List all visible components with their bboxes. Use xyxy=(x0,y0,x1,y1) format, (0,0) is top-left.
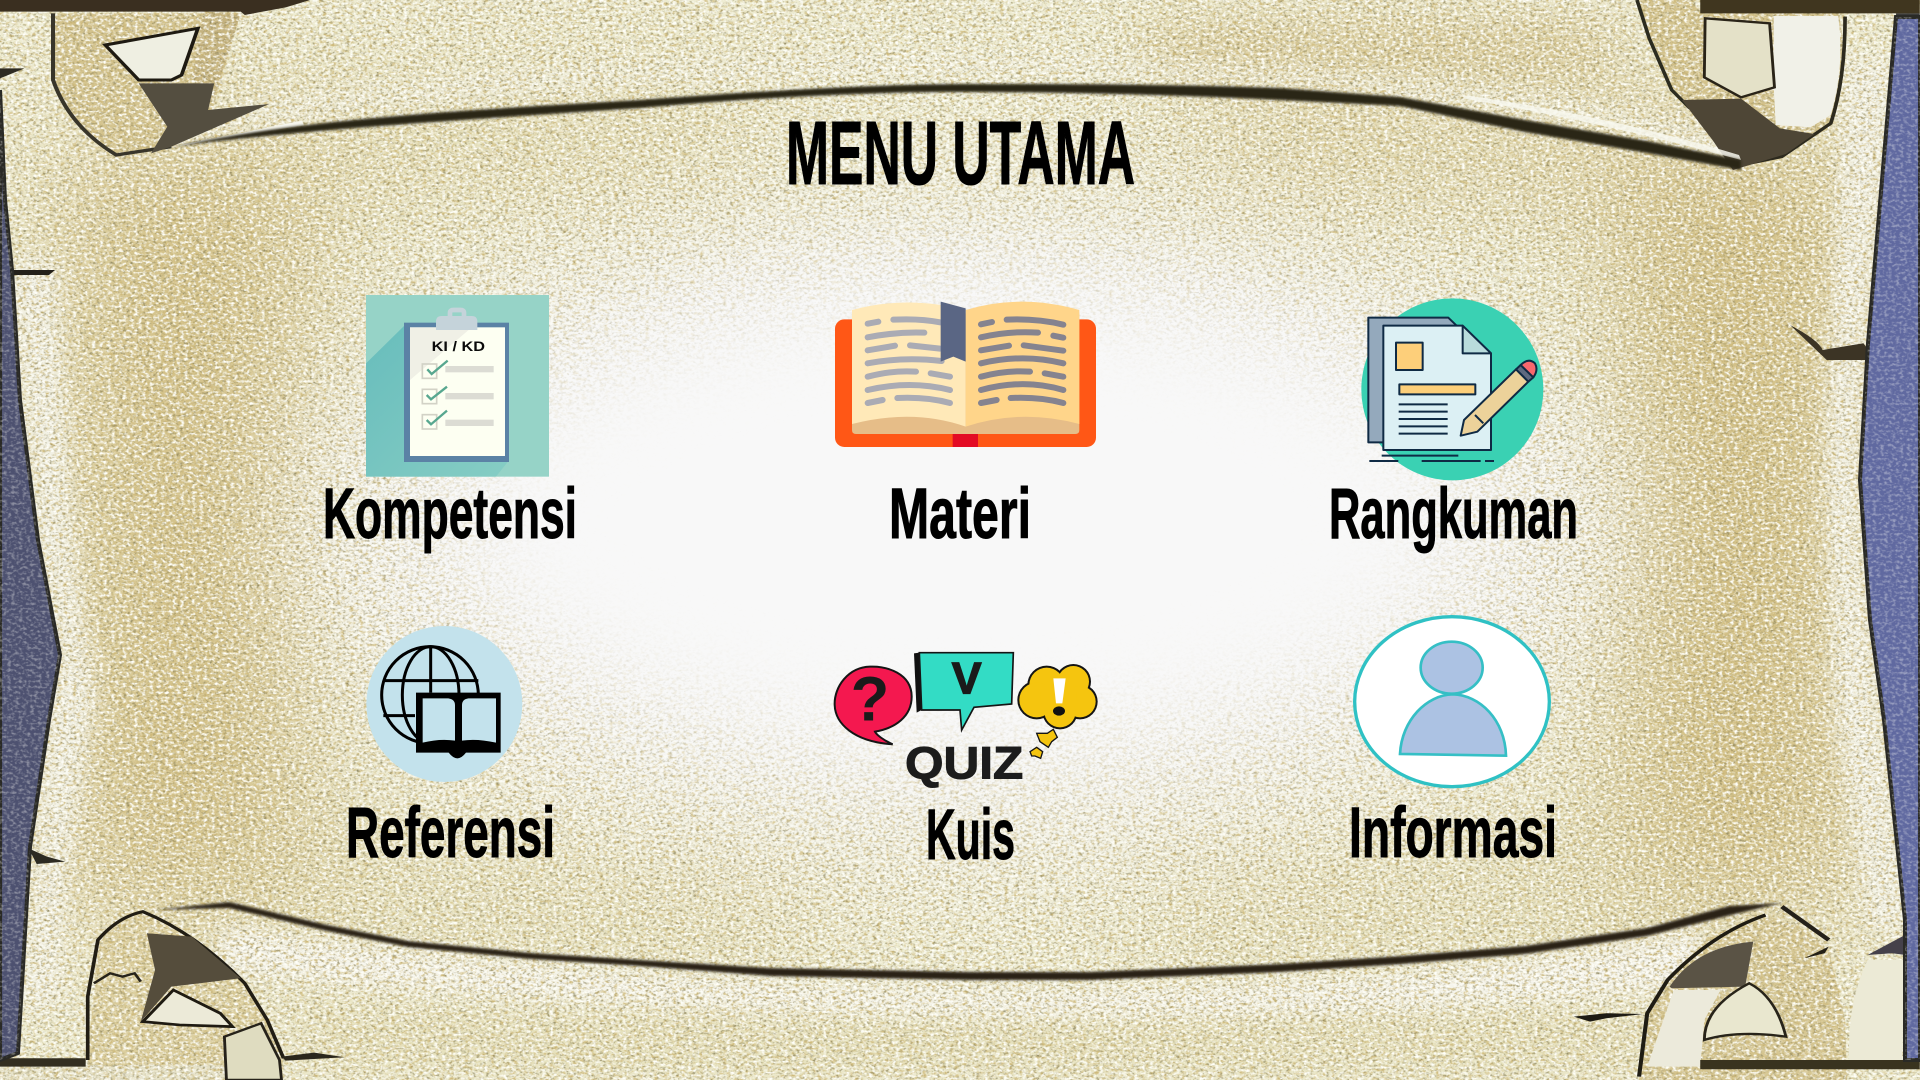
bottom fold line xyxy=(155,902,1782,980)
label: Materi: Materi xyxy=(889,475,1031,554)
curl fills: top left xyxy=(53,12,241,155)
label: Referensi: Referensi xyxy=(346,794,555,873)
icon: Kuis quiz bubbles xyxy=(835,653,1098,788)
icon: Kuis quiz bubbles: ? xyxy=(851,665,889,735)
label: Kuis: Kuis xyxy=(926,796,1015,875)
label: Informasi: Informasi xyxy=(1349,794,1557,873)
side strip left xyxy=(0,90,60,1060)
corner curl: bottom left xyxy=(0,848,345,1080)
side strip right xyxy=(1860,17,1920,1060)
top fold line xyxy=(171,84,1741,170)
icon: Informasi person xyxy=(1355,617,1549,787)
title: MENU UTAMA xyxy=(786,104,1135,204)
curl fills: bottom left xyxy=(0,912,284,1080)
icon: Kuis quiz bubbles: V xyxy=(952,654,982,703)
label: Kompetensi: Kompetensi xyxy=(323,475,577,554)
icon: Kompetensi clipboard xyxy=(366,295,549,477)
label: Rangkuman: Rangkuman xyxy=(1329,475,1578,554)
curl fills: bottom right xyxy=(1639,915,1847,1080)
icon: Kuis quiz bubbles: QUIZ xyxy=(905,737,1023,788)
corner curl: bottom right xyxy=(1574,907,1920,1077)
icon: Materi open book xyxy=(835,302,1096,447)
icon: Referensi globe and book xyxy=(366,626,522,782)
curl fills: top right xyxy=(1637,0,1845,167)
icon: Kompetensi clipboard: KI / KD xyxy=(432,339,485,354)
icon: Rangkuman document and pencil xyxy=(1361,298,1543,480)
corner curl: top right xyxy=(1464,0,1920,360)
corner curl: top left xyxy=(0,0,310,275)
